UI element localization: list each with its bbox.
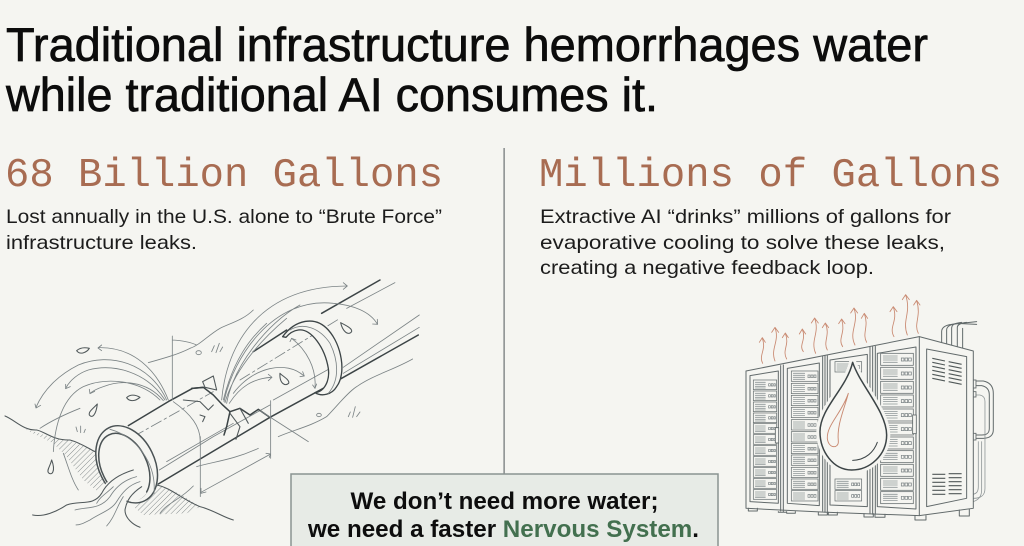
stat: 68 billion gallons: 68 Billion Gallons [5,153,443,199]
text: leaks description: infrastructure leaks. [6,232,197,254]
stat: millions of gallons: Millions of Gallons [539,153,1002,199]
cabinet feet [748,508,969,520]
pipe collars [84,321,342,513]
water drop [820,362,887,470]
title [5,18,928,121]
droplets [48,323,352,474]
server cabinet frames [746,337,973,516]
dimension lines [172,336,317,497]
callout: we need a faster Nervous System. [307,516,699,543]
water flowing out [33,470,147,527]
heat arrows [759,295,920,363]
server units [753,353,916,504]
coolant pipes [942,322,993,502]
title: Traditional infrastructure hemorrhages water [6,18,928,71]
text: leaks description [6,206,442,254]
text: AI description [540,206,952,279]
pipe body [128,280,419,484]
text: leaks description: Lost annually in the U.S. alone to “Brute Force” [6,206,442,228]
water jets [35,283,378,452]
side panel with vents [927,349,967,507]
callout: We don’t need more water; [350,488,658,515]
panel: extractive AI [539,153,1002,520]
crack [183,387,270,439]
illustration: data center with water drop [746,295,993,520]
text: AI description: evaporative cooling to solve these leaks, [540,232,945,254]
illustration: leaking pipe [5,280,419,527]
callout [291,474,718,546]
text: AI description: creating a negative feedback loop. [540,257,874,279]
ground and hatching [5,310,413,520]
divider [504,148,505,474]
panel: brute force leaks [5,153,443,527]
text: AI description: Extractive AI “drinks” millions of gallons for [540,206,952,228]
title: while traditional AI consumes it. [5,68,658,121]
